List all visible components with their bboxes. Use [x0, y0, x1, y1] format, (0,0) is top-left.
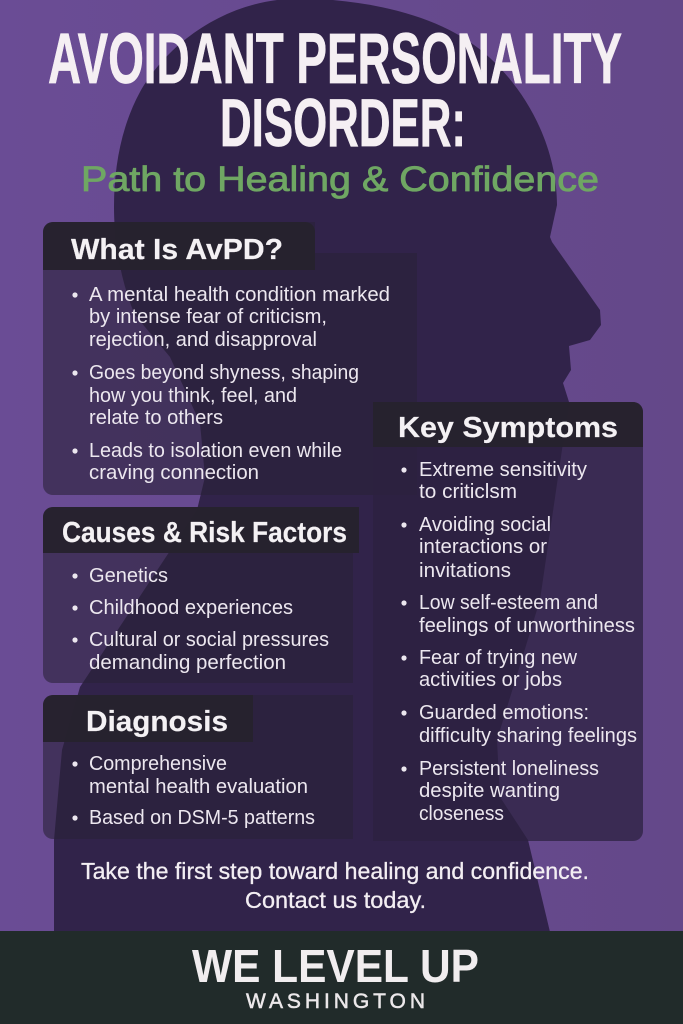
logo: Washington: WASHINGTON [246, 990, 425, 1013]
bullets: causes: Genetics [89, 564, 168, 587]
panel: Causes & Risk Factors [43, 507, 359, 683]
bullets: causes: Cultural or social pressures [89, 628, 329, 651]
bullets: symptoms: activities or jobs [419, 668, 562, 691]
logo: We Level Up: WE LEVEL UP [192, 940, 479, 992]
heading: What Is AvPD?: What Is AvPD? [71, 234, 283, 266]
call to action: Take the first step toward healing and confidence. [81, 858, 589, 884]
panel: Key Symptoms [373, 402, 643, 841]
bullets: definition: by intense fear of criticism, [89, 305, 327, 328]
bullets: symptoms: Low self-esteem and [419, 591, 598, 614]
bullets: symptoms: invitations [419, 559, 511, 582]
panel: What Is AvPD? [43, 222, 417, 495]
bullets: symptoms: Fear of trying new [419, 646, 577, 669]
heading: Causes & Risk Factors [43, 507, 359, 553]
bullets: symptoms: Persistent loneliness [419, 757, 599, 780]
panel: Diagnosis [43, 695, 353, 839]
heading: Causes & Risk Factors: Causes & Risk Factors [62, 517, 347, 549]
bullets: definition: Goes beyond shyness, shaping [89, 361, 359, 384]
bullets: symptoms: difficulty sharing feelings [419, 724, 637, 747]
footer band [0, 931, 683, 1024]
bullets: symptoms: feelings of unworthiness [419, 614, 635, 637]
bullets: symptoms: closeness [419, 802, 504, 825]
bullets: diagnosis: Comprehensive [89, 752, 227, 775]
bullets: definition: rejection, and disapproval [89, 328, 317, 351]
bullets: symptoms: Guarded emotions: [419, 701, 589, 724]
bullets: definition [72, 283, 390, 484]
heading: Diagnosis: Diagnosis [86, 706, 228, 738]
bullets: symptoms [401, 458, 637, 825]
subtitle: Path to Healing & Confidence [81, 160, 599, 199]
call to action: Contact us today. [245, 887, 426, 913]
bullets: diagnosis: Based on DSM-5 patterns [89, 806, 315, 829]
bullets: definition: craving connection [89, 461, 259, 484]
title [48, 20, 622, 161]
bullets: symptoms: to criticlsm [419, 480, 517, 503]
bullets: symptoms: Avoiding social [419, 513, 551, 536]
bullets: diagnosis: mental health evaluation [89, 775, 308, 798]
head silhouette [54, 0, 601, 932]
heading: Diagnosis [43, 695, 253, 742]
bullets: causes: Childhood experiences [89, 596, 293, 619]
heading: What Is AvPD? [43, 222, 315, 270]
bullets: symptoms: despite wanting [419, 779, 560, 802]
bullets: definition: how you think, feel, and [89, 384, 297, 407]
heading: Key Symptoms [373, 402, 643, 447]
bullets: causes: demanding perfection [89, 651, 286, 674]
bullets: definition: A mental health condition marked [89, 283, 390, 306]
bullets: definition: relate to others [89, 406, 223, 429]
bullets: symptoms: Extreme sensitivity [419, 458, 588, 481]
call to action [81, 858, 589, 913]
bullets: diagnosis [72, 752, 315, 829]
bullets: definition: Leads to isolation even while [89, 439, 342, 462]
title: DISORDER: [220, 85, 466, 161]
bullets: symptoms: interactions or [419, 535, 547, 558]
heading: Key Symptoms: Key Symptoms [398, 412, 618, 444]
bullets: causes [72, 564, 329, 674]
